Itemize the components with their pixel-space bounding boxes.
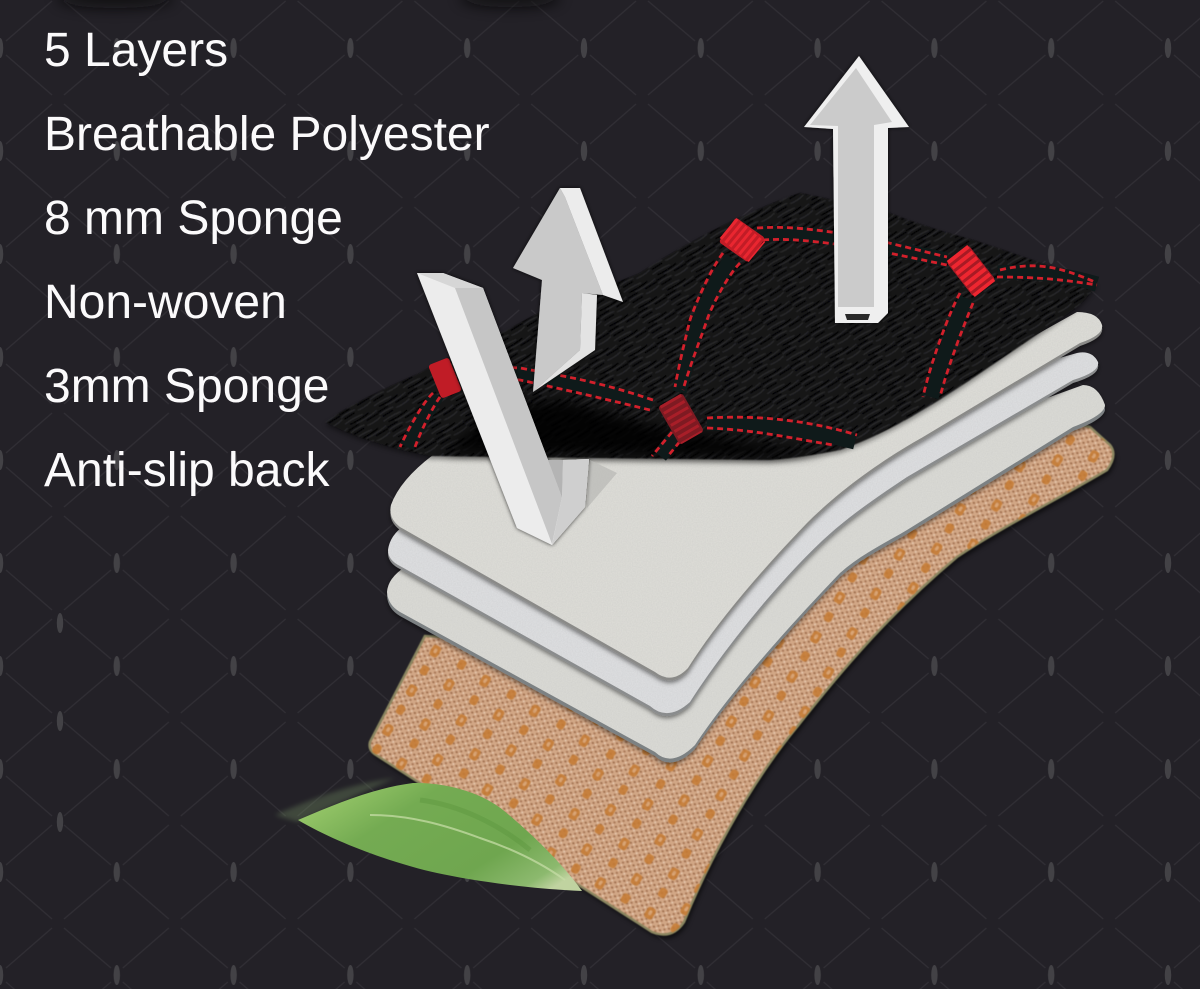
stitching bands xyxy=(407,233,1097,456)
layer: non-woven xyxy=(388,352,1098,716)
label: Anti-slip back: Anti-slip back xyxy=(44,444,330,497)
stitch junctions xyxy=(428,217,996,445)
arrow: downward arrow xyxy=(417,273,617,545)
layer: anti-slip back xyxy=(370,420,1115,938)
icon: green leaf xyxy=(275,778,582,891)
label: 8 mm Sponge: 8 mm Sponge xyxy=(44,192,343,245)
text block: layer list xyxy=(44,24,490,497)
label: Non-woven: Non-woven xyxy=(44,276,287,329)
layer: 8 mm sponge xyxy=(390,312,1102,681)
label: 3mm Sponge: 3mm Sponge xyxy=(44,360,330,413)
layer: breathable polyester top with red stitching xyxy=(325,193,1097,463)
arrow: diagonal upward arrow xyxy=(513,188,623,392)
arrow: tall upward arrow xyxy=(804,56,909,323)
label: 5 Layers: 5 Layers xyxy=(44,24,228,77)
red stitches xyxy=(400,227,1097,456)
label: Breathable Polyester: Breathable Polyester xyxy=(44,108,490,161)
illustration: layered seat cushion xyxy=(325,193,1115,938)
layer: 3mm sponge xyxy=(387,385,1105,763)
